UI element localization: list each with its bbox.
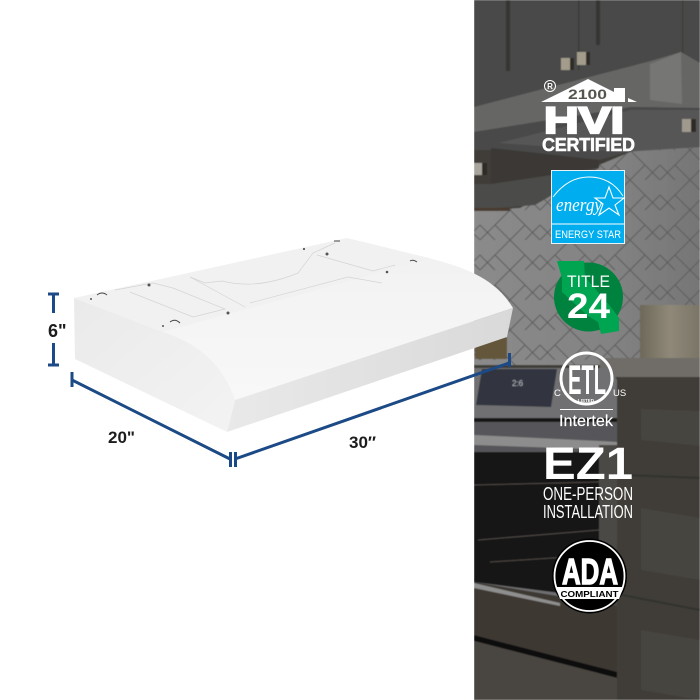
2100 number: 2100 xyxy=(568,87,607,102)
registered mark: R xyxy=(547,82,553,91)
Intertek label: Intertek xyxy=(559,413,613,430)
icon: star xyxy=(595,187,624,215)
countertop xyxy=(600,358,700,377)
C mark: C xyxy=(554,388,561,399)
panel: kitchen photo background xyxy=(474,0,700,700)
badge: ADA compliant xyxy=(552,538,627,614)
badge: EZ1 one-person installation xyxy=(543,438,633,522)
certified wordmark: CERTIFIED xyxy=(542,135,635,155)
product: white under-cabinet range hood xyxy=(74,238,513,432)
hood lower front band xyxy=(227,308,513,432)
badge: ETL listed Intertek xyxy=(554,353,626,430)
badge: HVI 2100 certified xyxy=(541,79,637,155)
panel: white page background xyxy=(0,0,474,700)
food behind hood tip xyxy=(475,337,507,359)
badge: ETL listed Intertek: ETL xyxy=(568,356,606,403)
divider line xyxy=(552,224,624,225)
title label: TITLE xyxy=(567,272,610,291)
divider line xyxy=(560,409,613,410)
upper cabinet doors xyxy=(474,0,700,150)
label: 6 inches: 6" xyxy=(48,321,67,341)
dimension: depth 20 inches xyxy=(72,372,230,467)
HVI wordmark: HVI xyxy=(544,100,624,141)
backsplash tile xyxy=(474,147,700,365)
oven xyxy=(474,368,617,700)
hood front curved face xyxy=(163,259,513,400)
hood side face xyxy=(74,298,235,432)
US mark: US xyxy=(613,388,626,399)
label: 30 inches: 30″ xyxy=(349,433,376,452)
installation label: INSTALLATION xyxy=(543,502,633,522)
pot on counter xyxy=(640,305,700,360)
one-person label: ONE-PERSON xyxy=(543,484,633,504)
badge: Title 24 xyxy=(554,261,623,334)
compliant band xyxy=(556,587,624,599)
label: 20 inches: 20" xyxy=(108,428,135,447)
hood top surface xyxy=(74,238,433,332)
badge: Energy Star xyxy=(552,170,624,244)
hood mounting holes xyxy=(90,241,417,327)
icon: house roof xyxy=(541,79,625,102)
ADA letters: ADA xyxy=(562,551,618,592)
logo arc xyxy=(553,177,623,197)
number 24: 24 xyxy=(567,287,611,326)
dimension: height 6 inches xyxy=(48,294,67,365)
dimension: width 30 inches xyxy=(235,353,510,467)
compliant label: COMPLIANT xyxy=(560,589,619,599)
listed label: LISTED xyxy=(578,398,595,403)
background range hood xyxy=(474,52,700,211)
lower cabinets xyxy=(618,377,700,700)
icon: California shape xyxy=(557,261,619,334)
energy star label: ENERGY STAR xyxy=(555,229,621,241)
oven: 2:6 xyxy=(512,379,524,388)
energy script: energy xyxy=(556,195,603,216)
hood mounting outlines xyxy=(115,243,395,317)
roof right piece xyxy=(628,98,637,102)
EZ1 wordmark: EZ1 xyxy=(543,438,633,489)
